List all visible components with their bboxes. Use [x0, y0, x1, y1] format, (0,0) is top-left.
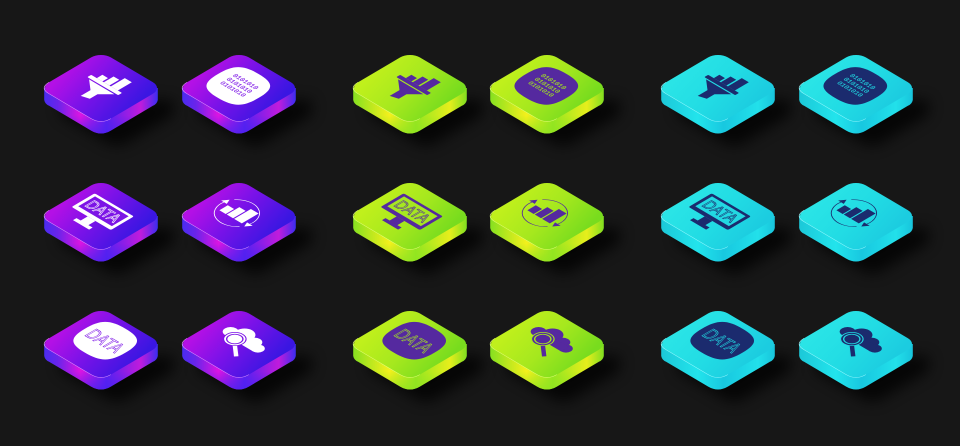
- tile: purple data monitor: [39, 180, 174, 274]
- tile: purple cloud search: [177, 308, 312, 402]
- tile: green data monitor: [348, 180, 483, 274]
- tile: purple data label: [39, 308, 174, 402]
- tile: green binary code: 0101010: [526, 81, 555, 98]
- tile: green funnel chart: [348, 52, 483, 146]
- tile: cyan cloud search: [794, 308, 929, 402]
- tile: purple binary code: 0101010: [230, 73, 260, 91]
- tile: green binary code: 0101010: [532, 77, 562, 94]
- tile: green binary code: [485, 52, 620, 146]
- tile: green data label: DATA: [389, 327, 438, 356]
- tile: cyan data monitor: [656, 180, 791, 274]
- tile: purple data monitor: DATA: [80, 198, 125, 225]
- tile: cyan binary code: 0101010: [835, 81, 864, 98]
- tile: purple binary code: [177, 52, 312, 146]
- tile: cyan binary code: 0101010: [847, 73, 877, 91]
- tile: purple funnel chart: [39, 52, 174, 146]
- tile: cyan data monitor: DATA: [697, 198, 742, 225]
- tile: cyan refresh chart: [794, 180, 929, 274]
- tile: cyan funnel chart: [656, 52, 791, 146]
- tile: purple data label: DATA: [80, 327, 129, 356]
- tile: cyan binary code: 0101010: [841, 77, 871, 94]
- tile: green data label: [348, 308, 483, 402]
- tile: green data monitor: DATA: [389, 198, 434, 225]
- tile: cyan binary code: [794, 52, 929, 146]
- tile: green cloud search: [485, 308, 620, 402]
- tile: purple refresh chart: [177, 180, 312, 274]
- tile: purple binary code: 0101010: [218, 81, 247, 98]
- tile: purple binary code: 0101010: [224, 77, 254, 94]
- tile: cyan data label: [656, 308, 791, 402]
- tile: green binary code: 0101010: [538, 73, 568, 91]
- tile: cyan data label: DATA: [697, 327, 746, 356]
- tile: green refresh chart: [485, 180, 620, 274]
